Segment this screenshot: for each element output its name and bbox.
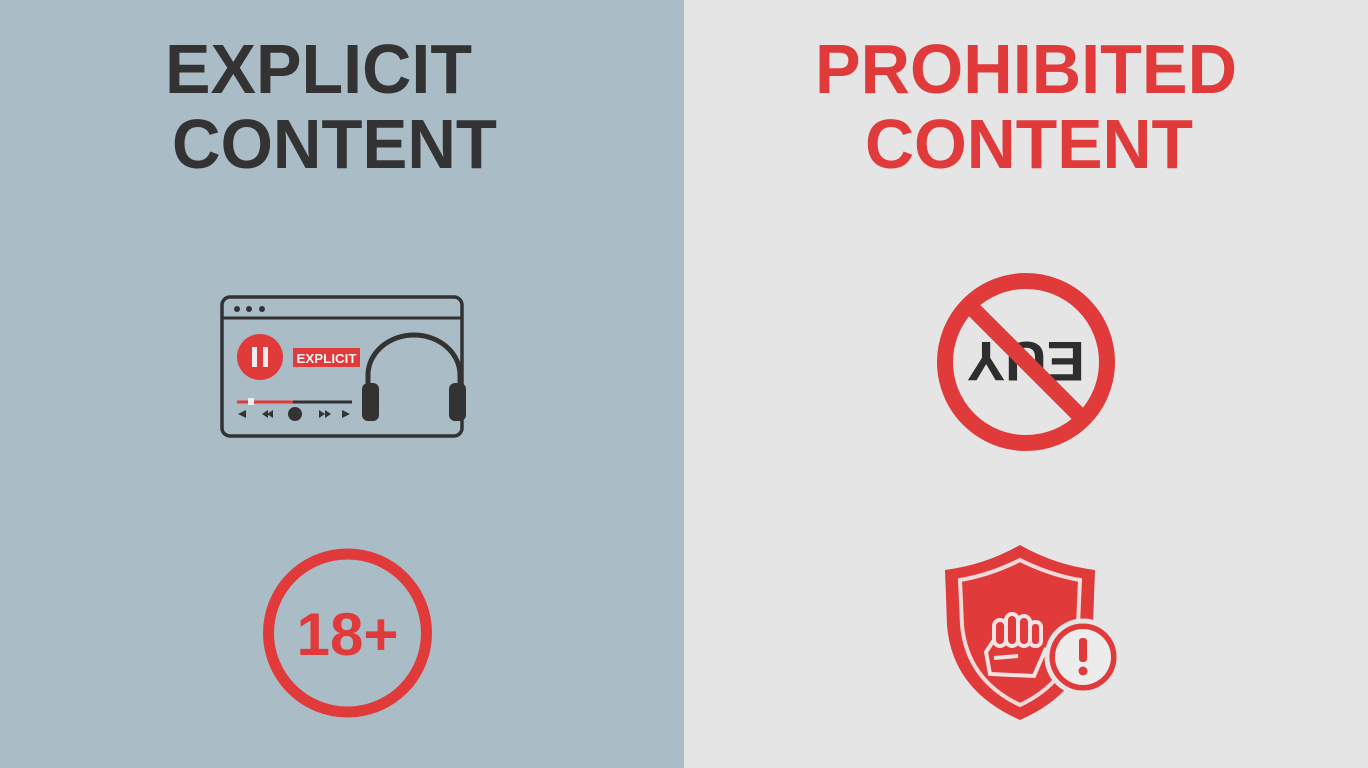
title: prohibited content: PROHIBITED: [815, 30, 1237, 108]
icon: headphones: [362, 335, 466, 421]
title: prohibited content: CONTENT: [865, 105, 1193, 183]
icon: 18+ badge: [268, 554, 426, 712]
title: explicit content: EXPLICIT: [165, 30, 472, 108]
icon: pause button: [237, 334, 283, 380]
warning circle: [1047, 621, 1119, 693]
icon: media player with headphones: [222, 297, 466, 436]
icon: prohibited sign with inverted text: EUY: [967, 330, 1085, 393]
icon: prohibited sign with inverted text: [945, 281, 1107, 443]
label: explicit tag: EXPLICIT: [296, 351, 357, 366]
progress bar: [237, 398, 352, 405]
title: explicit content: [165, 30, 497, 183]
label: explicit tag: [293, 348, 360, 367]
controls: [238, 407, 350, 421]
panel: prohibited background: [684, 0, 1368, 768]
fist: [986, 614, 1046, 676]
panel: explicit background: [0, 0, 684, 768]
title: prohibited content: [815, 30, 1237, 183]
title: explicit content: CONTENT: [172, 105, 497, 183]
icon: shield with fist and warning: [945, 545, 1119, 720]
icon: 18+ badge: 18+: [296, 601, 398, 668]
